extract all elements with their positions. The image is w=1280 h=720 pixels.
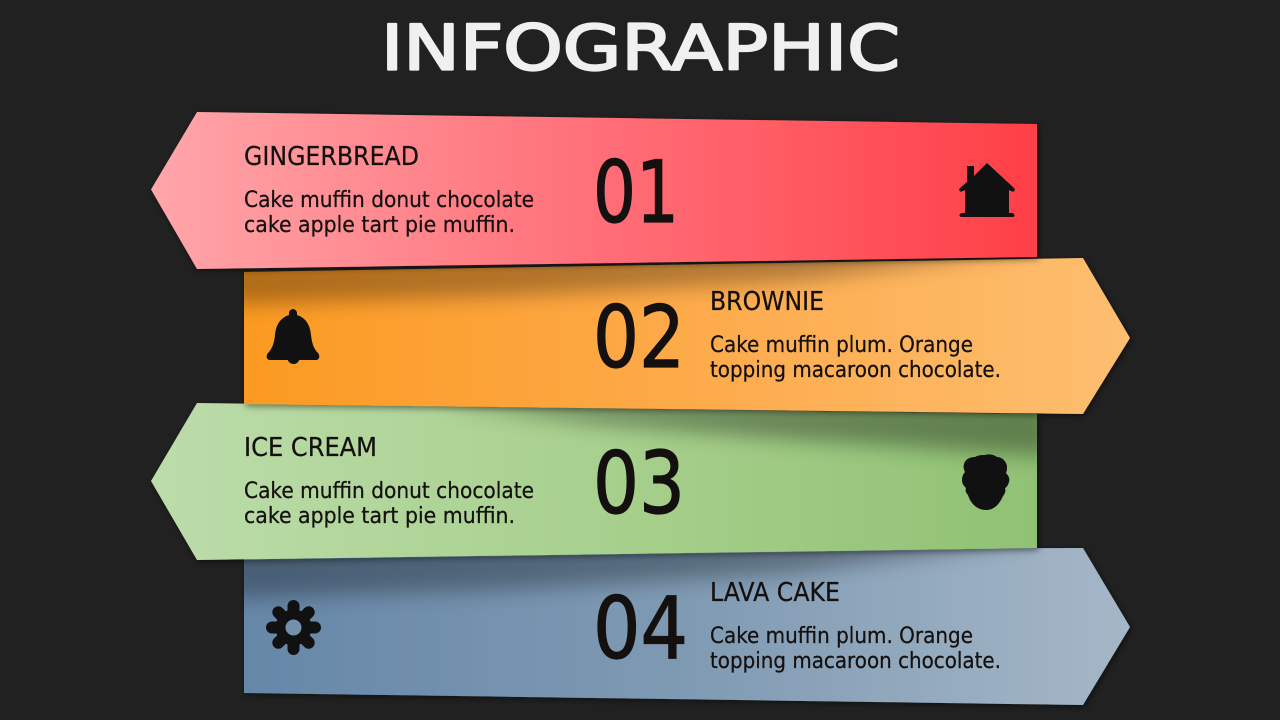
- number 02: 02: [593, 288, 685, 388]
- icon: gear: [272, 606, 315, 649]
- text: ice cream description: Cake muffin donut chocolate: [244, 479, 534, 504]
- icon: muffin blob: [962, 454, 1009, 510]
- icon: bell: [267, 309, 319, 364]
- text: gingerbread description: [244, 188, 534, 238]
- number 03: 03: [593, 434, 685, 534]
- panel: ice cream: [151, 403, 1050, 560]
- panel: brownie: [230, 250, 1130, 414]
- icon: house: [959, 163, 1015, 217]
- text: gingerbread description: Cake muffin donut chocolate: [244, 188, 534, 213]
- text: ice cream description: [244, 479, 534, 529]
- text: gingerbread description: cake apple tart pie muffin.: [244, 213, 515, 238]
- text: ice cream description: cake apple tart pie muffin.: [244, 504, 515, 529]
- text: brownie description: Cake muffin plum. Orange: [710, 333, 973, 358]
- text: lava cake description: [710, 624, 1001, 674]
- number 04: 04: [593, 579, 688, 679]
- text: brownie description: [710, 333, 1001, 383]
- heading: ice cream: ICE CREAM: [244, 433, 377, 463]
- text: lava cake description: topping macaroon chocolate.: [710, 649, 1001, 674]
- panel: lava cake: [230, 540, 1130, 705]
- text: brownie description: topping macaroon chocolate.: [710, 358, 1001, 383]
- heading: lava cake: LAVA CAKE: [710, 578, 840, 608]
- number 01: 01: [593, 143, 679, 243]
- heading: gingerbread: GINGERBREAD: [244, 142, 419, 172]
- heading: brownie: BROWNIE: [710, 287, 824, 317]
- infographic canvas: [151, 22, 1130, 707]
- text: lava cake description: Cake muffin plum. Orange: [710, 624, 973, 649]
- panel: gingerbread: [151, 112, 1037, 269]
- title: INFOGRAPHIC: [381, 12, 900, 84]
